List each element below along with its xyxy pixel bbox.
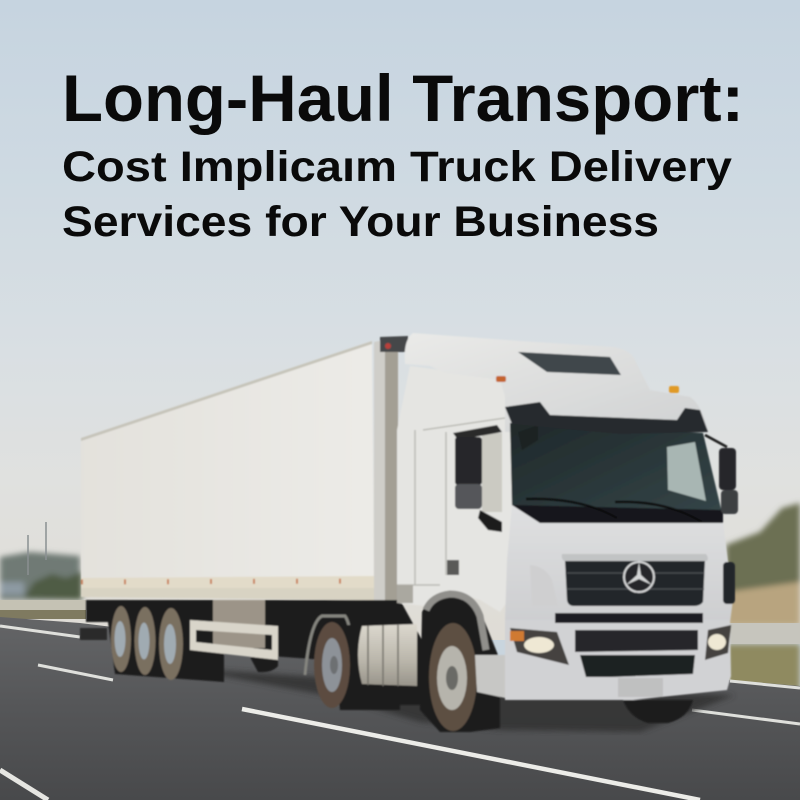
right headlight [705,625,731,660]
left headlight [510,628,569,665]
title [62,61,744,246]
front wheel [429,623,477,731]
background sky [0,0,800,640]
bumper [505,613,731,700]
rear far wheel [250,657,278,672]
cab side [397,366,514,612]
left mirror [453,425,502,532]
trailer axle wheel 2 [134,607,156,675]
far front wheel [623,700,693,723]
front face [505,505,733,622]
trailer front edge [374,339,388,600]
logo star [624,562,654,592]
right recess [723,562,735,604]
door handle [447,560,459,575]
front mudguard [475,655,505,698]
trailer axle wheel 1 [111,606,131,672]
rear light bar [80,628,107,640]
heading line 1: Long-Haul Transport: [62,61,744,135]
lower cab strip [397,585,413,603]
fuel tank [358,624,417,686]
trailer axle wheel 3 [159,608,183,680]
trailer box [81,336,408,600]
right mirror [705,435,738,514]
door window [482,433,502,512]
truck [80,333,738,732]
side guard [190,620,278,660]
road [0,617,800,800]
guard rails [0,522,800,644]
corner recess [530,565,558,606]
marker lights [496,376,679,393]
grille [562,554,708,606]
roadside landscape [0,503,800,690]
fender [426,594,486,650]
chassis [86,600,422,705]
roof fairing [405,333,708,432]
door panel lines [397,418,505,585]
roof vent [518,352,621,375]
windshield [510,423,723,526]
trailer side panel [81,341,374,600]
sun visor [505,402,708,434]
drive wheel assembly [305,616,400,710]
heading line 2: Cost Implicaım Truck Delivery [62,143,732,191]
truck shadow [180,668,735,732]
heading line 3: Services for Your Business [62,198,659,246]
front wheel well [420,592,500,732]
side panel between guard [213,600,265,648]
reflector strip [81,576,374,588]
